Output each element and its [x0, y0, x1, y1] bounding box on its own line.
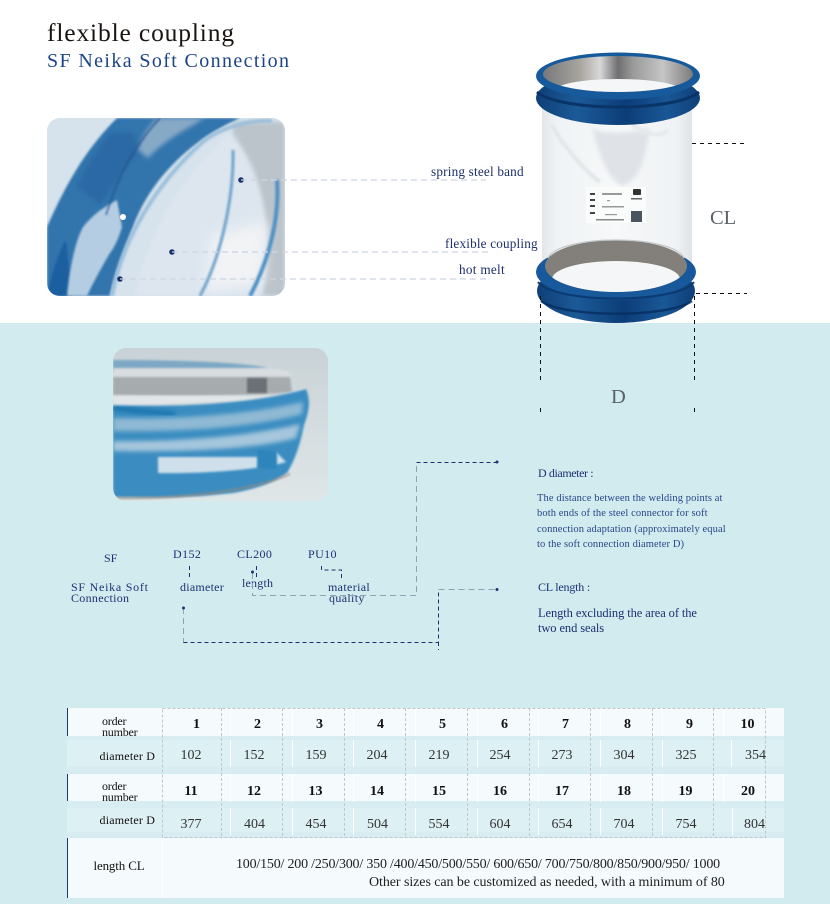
code meaning: SF Neika Soft Connection: SF Neika Soft	[71, 580, 149, 594]
D label: D	[611, 386, 626, 408]
row: length CL: length CL	[94, 858, 145, 873]
text block: D diameter: to the soft connection diameter D)	[537, 539, 685, 550]
row: order number 1-10: 1	[193, 717, 200, 732]
row: order number 1-10: 3	[316, 717, 323, 732]
row: diameter D 377-804: 554	[428, 817, 450, 832]
connector lines for model code	[182, 460, 498, 650]
subtitle: SF Neika Soft Connection	[47, 50, 290, 72]
row: diameter D 102-354: 273	[552, 748, 572, 763]
row: length CL: Other sizes can be customized as needed, with a minimum of 80	[369, 875, 725, 890]
row: order number 11-20: 11	[184, 784, 198, 799]
row: diameter D 377-804: 754	[676, 817, 696, 832]
row: diameter D 377-804: diameter D	[100, 813, 155, 827]
row: order number 1-10: order	[102, 714, 127, 728]
row: diameter D 102-354: 204	[366, 748, 388, 763]
label: hot melt: hot melt	[459, 262, 505, 277]
row: diameter D 377-804: 804	[744, 817, 765, 832]
row: diameter D 377-804	[100, 813, 765, 832]
row: diameter D 102-354	[100, 748, 766, 763]
row: order number 1-10: number	[102, 725, 138, 739]
table row backgrounds	[67, 708, 784, 898]
row: order number 11-20: 20	[741, 784, 755, 799]
CL label: CL	[710, 207, 736, 229]
row: diameter D 102-354: 159	[306, 748, 326, 763]
label: spring steel band: spring steel band	[431, 164, 524, 179]
row: diameter D 102-354: 325	[676, 748, 696, 763]
code meaning: material quality: material	[328, 580, 370, 594]
code meaning: material quality: quality	[329, 591, 365, 605]
text block: D diameter	[537, 466, 728, 550]
row: diameter D 377-804: 504	[367, 817, 388, 832]
row: order number 1-10: 5	[439, 717, 446, 732]
row: diameter D 377-804: 377	[180, 817, 202, 832]
text block: CL length: Length excluding the area of the	[538, 606, 697, 620]
text block: CL length	[538, 580, 700, 635]
photo: coupling edge close-up	[113, 348, 328, 501]
size table	[67, 708, 784, 898]
row: order number 1-10: 2	[254, 717, 261, 732]
text block: D diameter: D diameter :	[538, 466, 593, 480]
callout dots	[117, 177, 244, 282]
text block: CL length: two end seals	[538, 621, 604, 635]
row: order number 11-20: 15	[432, 784, 446, 799]
row: diameter D 377-804: 454	[306, 817, 326, 832]
row: diameter D 102-354: 304	[614, 748, 634, 763]
row: order number 11-20: 19	[678, 784, 692, 799]
D dimension lines	[540, 296, 694, 412]
text block: D diameter: The distance between the welding points at	[537, 493, 723, 504]
row: diameter D 102-354: 152	[244, 748, 264, 763]
row: order number 1-10: 10	[740, 717, 754, 732]
row: order number 1-10: 4	[377, 717, 384, 732]
row: diameter D 377-804: 654	[552, 817, 572, 832]
row: order number 1-10: 6	[501, 717, 508, 732]
label: flexible coupling: flexible coupling	[445, 236, 538, 251]
bottom ring	[537, 259, 695, 323]
row: order number 11-20: number	[102, 790, 138, 804]
row: diameter D 377-804: 404	[244, 817, 265, 832]
row: length CL: 100/150/ 200 /250/300/ 350 /400/450/500/550/ 600/650/ 700/750/800/850/900/950/ 1000	[236, 857, 720, 872]
row: diameter D 102-354: 102	[180, 748, 202, 763]
title: flexible coupling	[47, 18, 235, 47]
product sticker	[586, 187, 646, 223]
row: diameter D 102-354: diameter D	[100, 749, 155, 763]
background: lower teal panel	[0, 323, 830, 904]
row: order number 11-20: 16	[493, 784, 507, 799]
row: order number 1-10: 8	[624, 717, 631, 732]
code meaning: SF Neika Soft Connection: Connection	[71, 591, 129, 605]
photo: coupling close-up with callout dots	[47, 118, 285, 296]
row: length CL	[94, 857, 725, 890]
row: diameter D 102-354: 254	[490, 748, 510, 763]
row: order number 1-10	[102, 714, 754, 739]
product photo: transparent coupling	[536, 52, 700, 323]
row: diameter D 377-804: 704	[614, 817, 634, 832]
row: diameter D 102-354: 354	[745, 748, 766, 763]
row: order number 11-20: 13	[308, 784, 322, 799]
CL dimension lines	[692, 144, 747, 294]
row: order number 11-20: 12	[247, 784, 261, 799]
text block: D diameter: both ends of the steel connector for soft	[537, 508, 708, 519]
row: order number 11-20: 14	[370, 784, 384, 799]
code meaning: diameter: diameter	[180, 580, 224, 594]
model code: CL200: CL200	[237, 547, 272, 561]
row: diameter D 102-354: 219	[428, 748, 450, 763]
text block: CL length: CL length :	[538, 580, 590, 594]
code meaning: length: length	[242, 576, 273, 590]
glass body	[542, 105, 692, 275]
top ring	[536, 71, 700, 125]
model code: D152: D152	[173, 547, 201, 561]
model code: SF: SF	[104, 551, 118, 565]
text block: D diameter: connection adaptation (approximately equal	[537, 524, 726, 535]
row: order number 1-10: 9	[686, 717, 693, 732]
row: order number 11-20: order	[102, 779, 127, 793]
row: order number 1-10: 7	[562, 717, 569, 732]
row: diameter D 377-804: 604	[490, 817, 510, 832]
row: order number 11-20: 17	[555, 784, 569, 799]
leader lines	[120, 180, 488, 279]
row: order number 11-20	[102, 779, 755, 804]
model code: PU10: PU10	[308, 547, 337, 561]
row: order number 11-20: 18	[617, 784, 631, 799]
